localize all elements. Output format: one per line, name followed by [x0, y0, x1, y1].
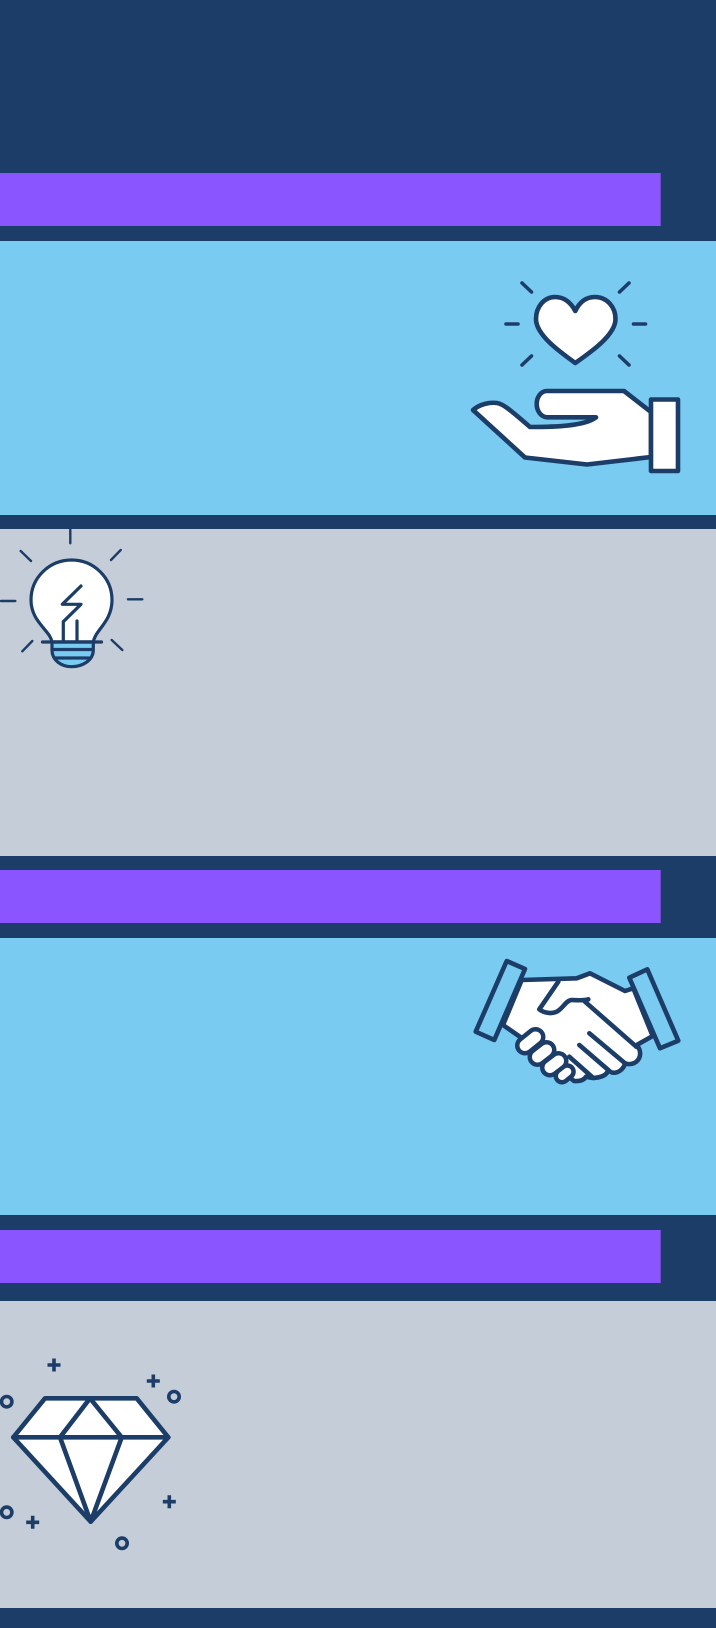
icon: sparkle circles	[2, 1392, 179, 1549]
icon: heart rays	[506, 283, 646, 365]
icon: handshake	[476, 961, 678, 1081]
banner bar 2	[0, 870, 661, 923]
banner bar 1	[0, 173, 661, 226]
panel: diamond	[0, 1301, 716, 1608]
panel: light bulb	[0, 529, 716, 856]
icon: diamond	[13, 1398, 168, 1522]
icon: light bulb	[1, 530, 142, 667]
banner bar 3	[0, 1230, 661, 1283]
panel: hand and heart	[0, 241, 716, 515]
icon: heart	[536, 297, 616, 363]
panel: handshake	[0, 938, 716, 1215]
icon: sparkle plus signs	[26, 1358, 176, 1529]
icon: open hand	[473, 391, 678, 471]
icon: knuckles	[525, 1037, 567, 1076]
